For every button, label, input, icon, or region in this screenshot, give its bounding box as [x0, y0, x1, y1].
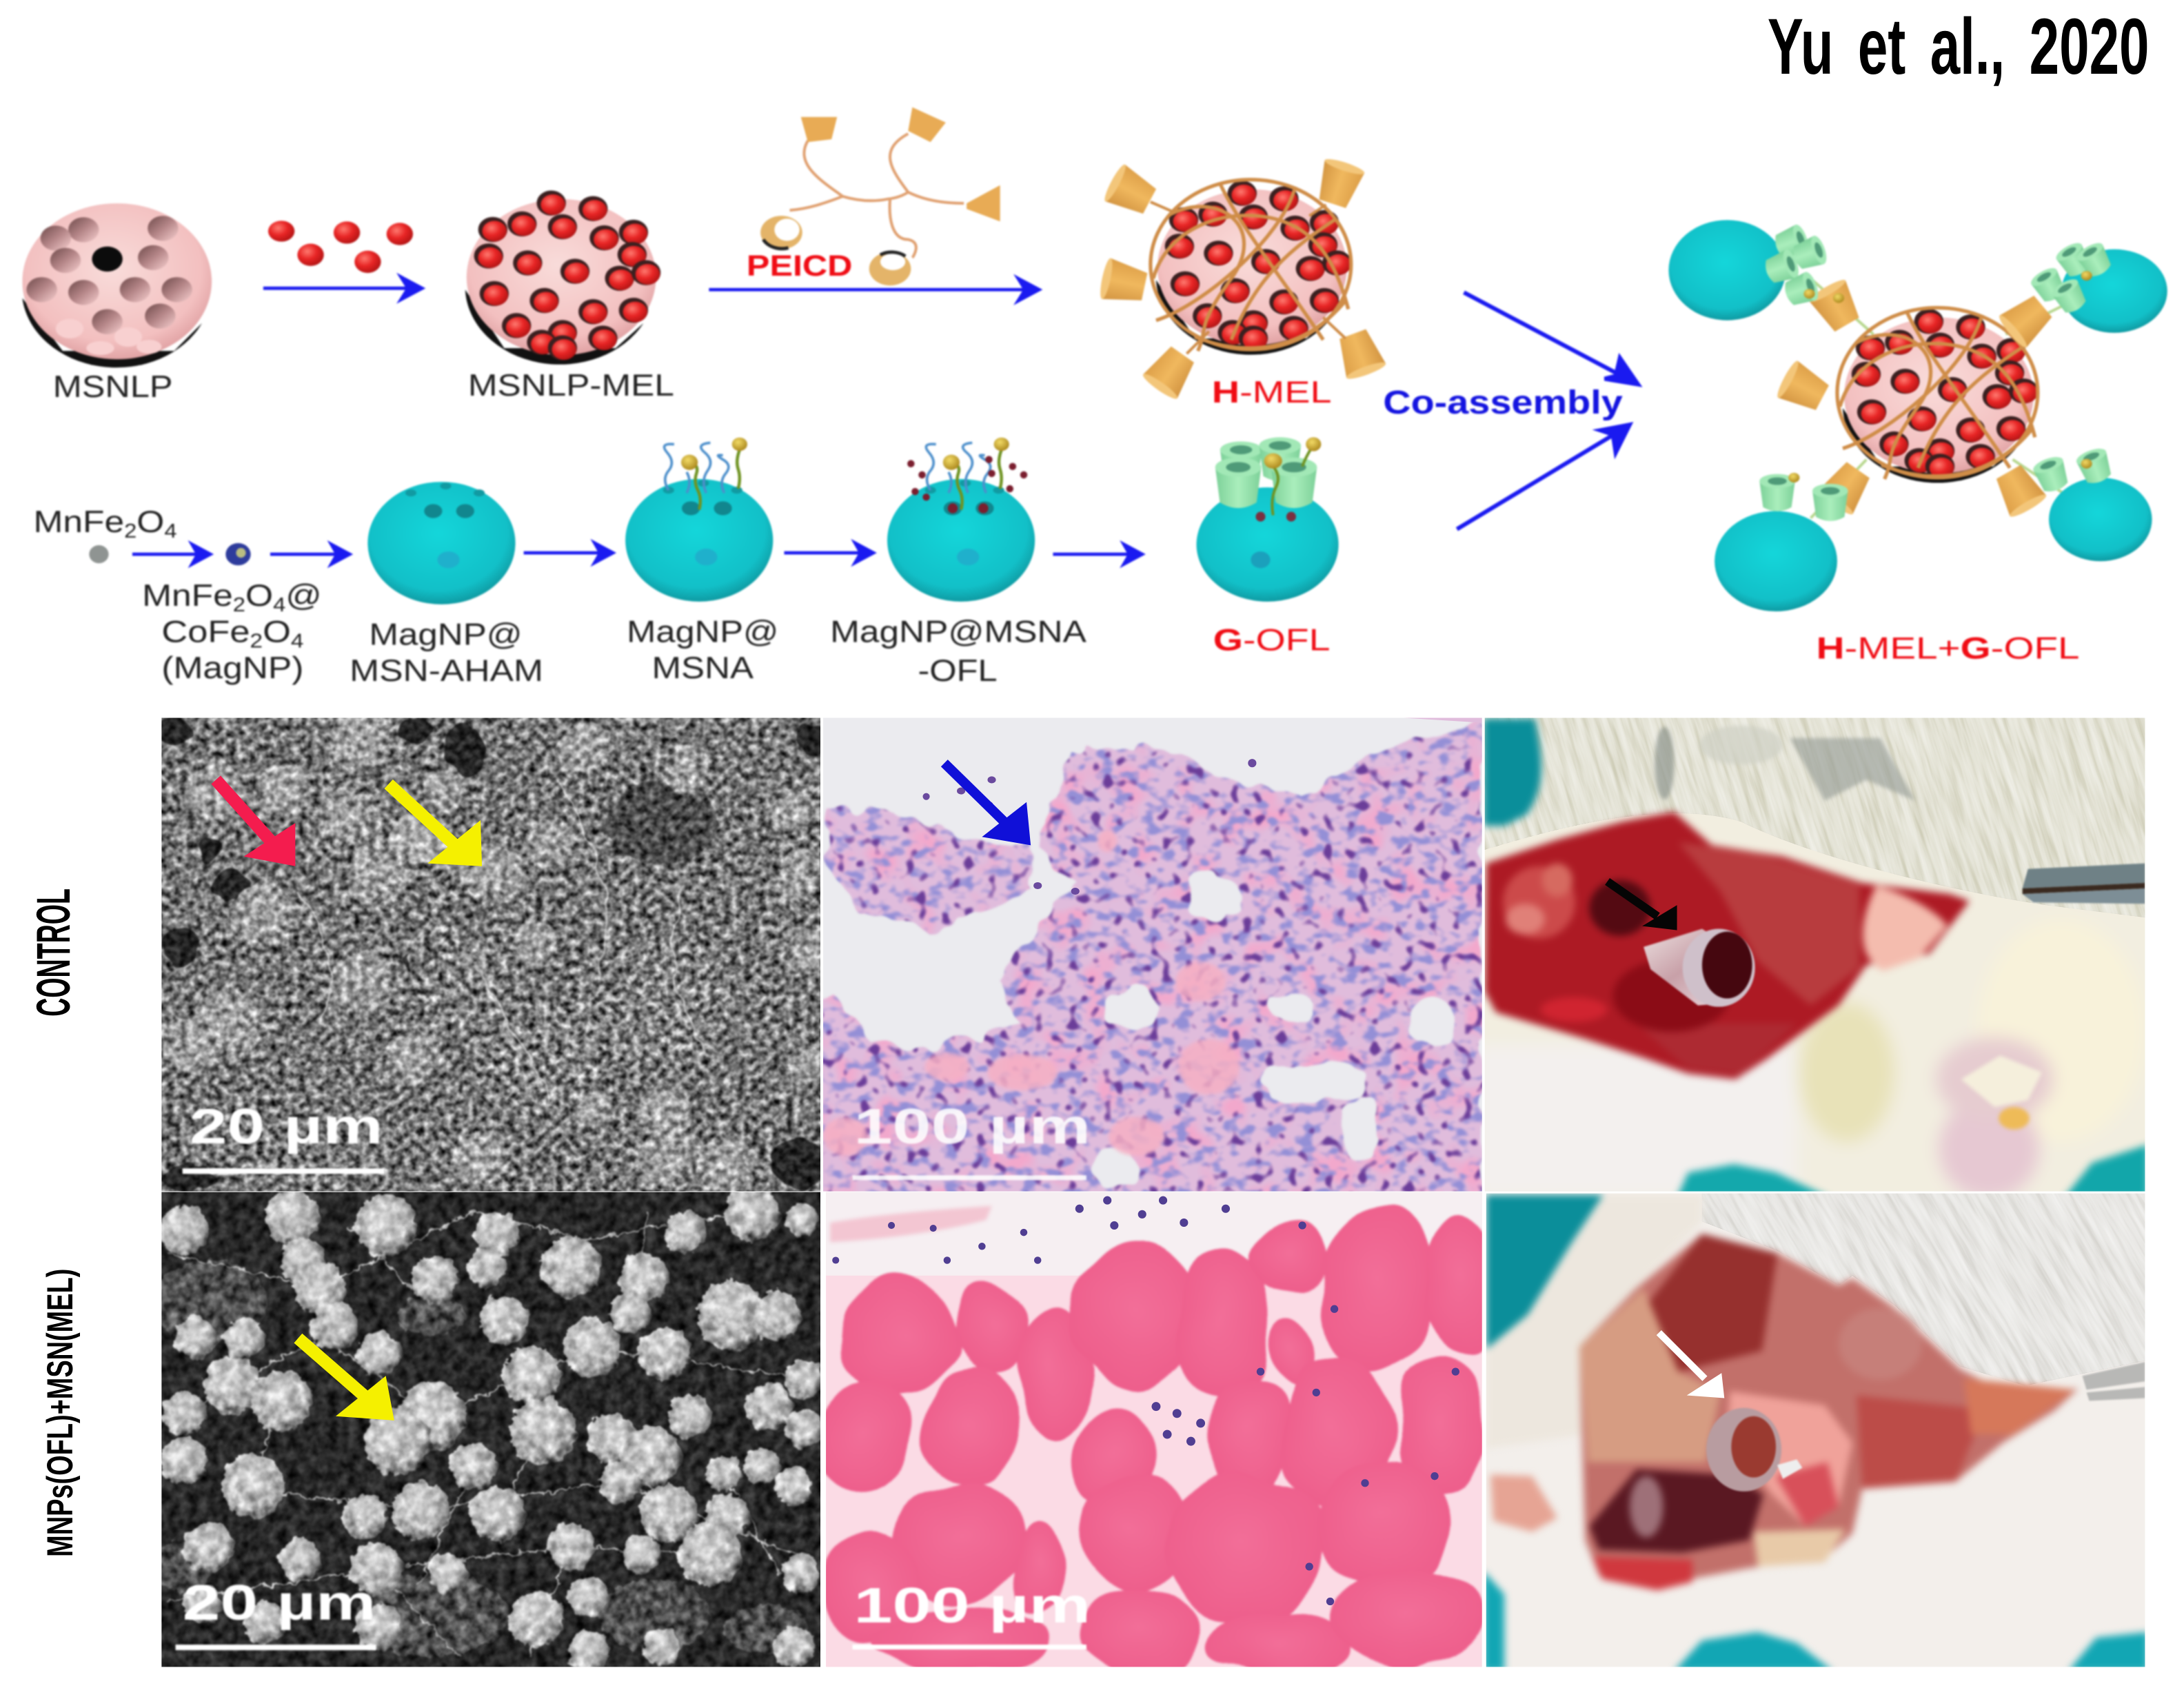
label: MagNP@MSNA: [627, 615, 778, 685]
sphere: MagNP@MSNA: [625, 438, 773, 602]
panel: wound photo control: [1485, 718, 2145, 1191]
label: MagNP@MSN-AHAM: MagNP@: [369, 618, 523, 651]
label: MagNP@MSN-AHAM: [350, 618, 543, 688]
label: MnFe2O4@CoFe2O4 (MagNP): CoFe: [161, 615, 236, 649]
label: MnFe2O4@CoFe2O4 (MagNP): MnFe: [142, 579, 221, 613]
sphere: MagNP@MSN-AHAM: [367, 482, 516, 604]
arrow: white: [1659, 1333, 1724, 1398]
panel: SEM control: [153, 707, 830, 1198]
arrow: yellow lower: [298, 1338, 394, 1421]
particle: MagNP: [225, 543, 251, 565]
scale bar: SEM control: 20 µm: [190, 1099, 383, 1154]
arrow: [270, 544, 350, 564]
arrow: [524, 543, 613, 562]
sphere: MSNLP: [22, 203, 212, 367]
label: MnFe2O4@CoFe2O4 (MagNP): (MagNP): [161, 651, 303, 685]
sphere: G-OFL: [1197, 437, 1339, 602]
label: MagNP@MSNA-OFL: -OFL: [918, 654, 998, 688]
sphere: MagNP@MSNA-OFL: [887, 438, 1035, 602]
label: MagNP@MSNA: MSNA: [652, 651, 754, 685]
arrow: yellow: [389, 784, 482, 866]
label: MnFe2O4@CoFe2O4 (MagNP): O: [263, 615, 291, 649]
label: H-MEL+G-OFL: H -MEL+ G -OFL: [1817, 632, 2079, 666]
label: MnFe2O4@CoFe2O4 (MagNP): 2: [233, 593, 245, 615]
panel: H&E treated: [816, 1192, 1495, 1680]
label: MnFe2O4@CoFe2O4 (MagNP): @: [285, 579, 322, 613]
scale bar: H&E control: 100 µm: [854, 1099, 1091, 1154]
sphere: H-MEL: [1098, 156, 1387, 402]
label: MnFe2O4@CoFe2O4 (MagNP): 4: [273, 593, 285, 615]
label: MagNP@MSNA: MagNP@: [627, 615, 778, 649]
panel: SEM treated: [150, 1183, 829, 1674]
arrow: [263, 277, 422, 299]
implant tube: [1706, 1408, 1802, 1492]
label: MnFe2O4: MnFe: [33, 505, 112, 539]
label: PEICD: PEICD: [747, 250, 852, 282]
row label: MNPs(OFL)+MSN(MEL): MNPs(OFL)+MSN(MEL): [40, 1269, 81, 1557]
label: MagNP@MSNA-OFL: MagNP@MSNA: [830, 615, 1086, 649]
scale bar: H&E treated: 100 µm: [854, 1578, 1091, 1633]
arrow: co-assembly upper: [1464, 292, 1638, 385]
scale bar: SEM treated: [176, 1575, 376, 1650]
label: MnFe2O4@CoFe2O4 (MagNP): 2: [250, 630, 263, 652]
label: MnFe2O4: 2: [124, 520, 136, 542]
row label: CONTROL: CONTROL: [27, 888, 80, 1017]
arrow: black: [1608, 882, 1677, 930]
label: MagNP@MSN-AHAM: MSN-AHAM: [350, 654, 543, 688]
arrow: co-assembly lower: [1457, 425, 1630, 529]
implant tube: [1644, 929, 1755, 1007]
arrow: [784, 543, 873, 562]
scale bar: SEM control: [183, 1099, 385, 1174]
arrow: blue: [944, 763, 1031, 845]
arrow: red: [216, 780, 295, 866]
label: MnFe2O4@CoFe2O4 (MagNP): [142, 579, 322, 685]
final assembly H-MEL+G-OFL: [1668, 220, 2167, 611]
scale bar: H&E treated: [852, 1578, 1091, 1649]
label: MnFe2O4@CoFe2O4 (MagNP): 4: [291, 630, 303, 652]
forceps: [2083, 1362, 2145, 1401]
sphere: MSNLP-MEL: [465, 190, 660, 365]
label: MnFe2O4@CoFe2O4 (MagNP): O: [245, 579, 273, 613]
scale bar: SEM treated: 20 µm: [183, 1575, 376, 1631]
label: MSNLP: MSNLP: [53, 370, 173, 404]
synthesis scheme: [22, 108, 2167, 688]
label: Co-assembly: Co-assembly: [1383, 384, 1623, 421]
arrow: [1053, 544, 1142, 564]
label: G-OFL: G -OFL: [1213, 624, 1330, 658]
arrow: [132, 544, 210, 564]
label: H-MEL: H -MEL: [1212, 376, 1332, 409]
forceps: [2023, 864, 2145, 904]
scale bar: H&E control: [852, 1099, 1091, 1180]
label: MnFe2O4: O: [136, 505, 164, 539]
particle: MnFe2O4 core: [89, 545, 109, 563]
label: MagNP@MSNA-OFL: [830, 615, 1086, 688]
panel: H&E control: [815, 717, 1484, 1198]
label: MSNLP-MEL: MSNLP-MEL: [468, 369, 674, 403]
panel: wound photo treated: [1477, 989, 2184, 1674]
melittin balls: [268, 221, 413, 273]
arrow: [709, 278, 1039, 301]
label: MnFe2O4: 4: [164, 520, 177, 542]
skin sore: [1961, 1055, 2042, 1130]
PEICD polymer: [760, 108, 1000, 285]
